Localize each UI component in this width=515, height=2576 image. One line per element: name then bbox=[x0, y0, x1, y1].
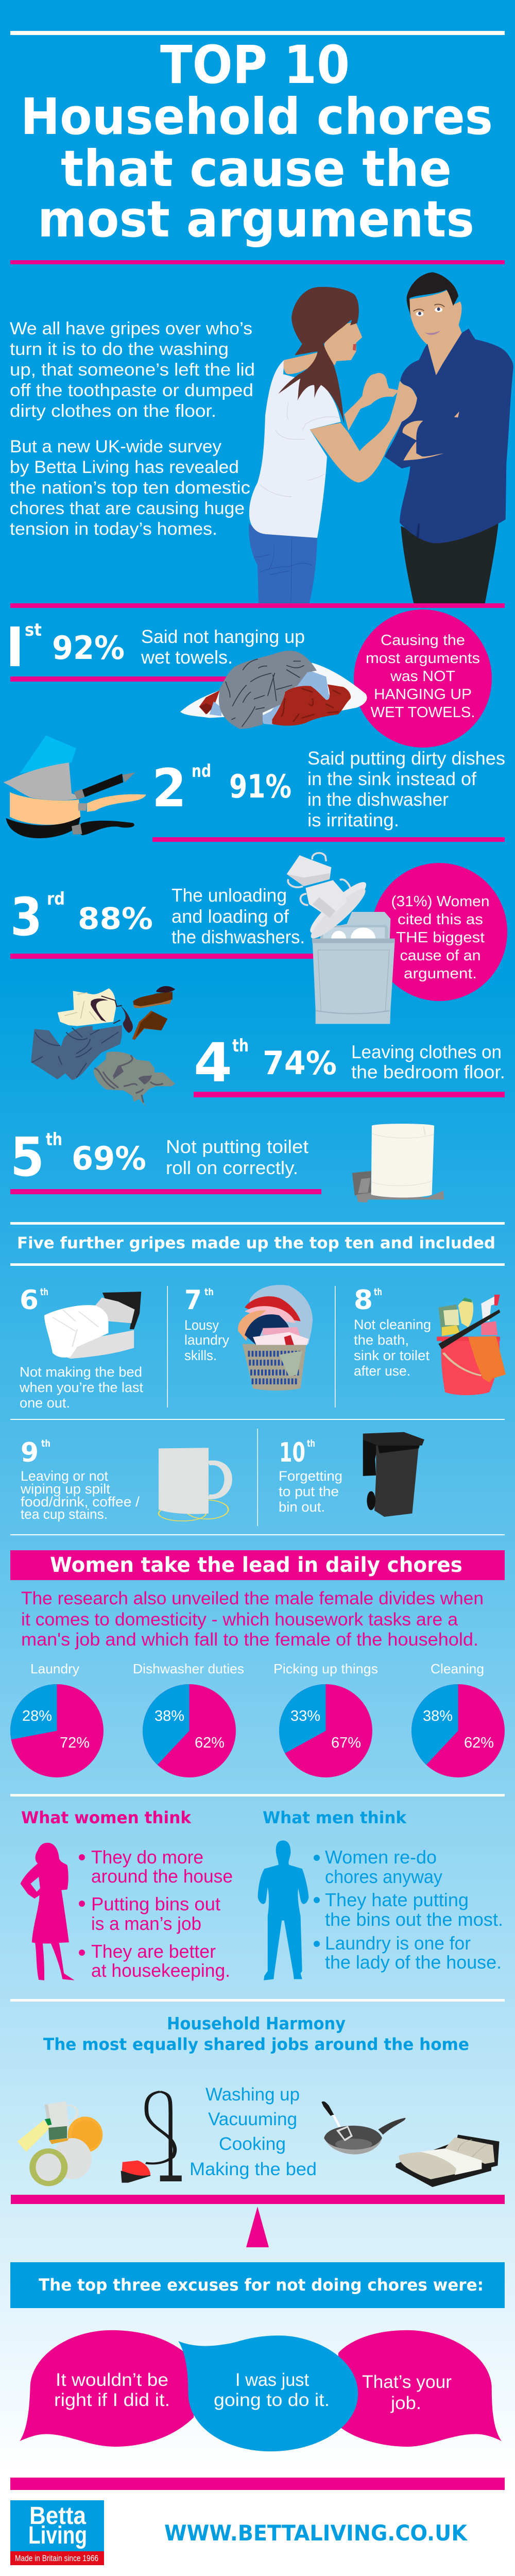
callout: causing the most arguments: HANGING UP bbox=[374, 686, 472, 703]
callout: 31% of women: cause of an bbox=[400, 947, 481, 964]
intro text: But a new UK-wide survey bbox=[10, 437, 221, 456]
intro text: by Betta Living has revealed bbox=[10, 457, 239, 477]
callout: 31% of women: THE biggest bbox=[396, 929, 485, 946]
panel: what men think: Women re-do bbox=[325, 1846, 437, 1868]
chore 9: cup stains: Leaving or not bbox=[21, 1468, 108, 1484]
panel: what men think: Laundry is one for bbox=[325, 1933, 471, 1954]
chore 9: cup stains: 9 bbox=[21, 1437, 39, 1468]
speech bubble: I was just going to do it bbox=[178, 2335, 358, 2451]
icon: frying pan bbox=[321, 2102, 405, 2155]
shared jobs list: Vacuuming bbox=[208, 2109, 297, 2129]
banner: top three excuses: The top three excuses for not doing chores were: bbox=[39, 2275, 484, 2295]
chore 3: loading the dishwasher: 88% bbox=[78, 901, 153, 936]
panel: what men think: chores anyway bbox=[325, 1866, 442, 1887]
pie chart: laundry: 72% bbox=[60, 1735, 90, 1751]
panel: what women think: What women think bbox=[21, 1808, 192, 1827]
chore 5: toilet roll: Not putting toilet bbox=[166, 1136, 308, 1157]
chore 3: loading the dishwasher bbox=[10, 885, 319, 959]
callout: causing the most arguments: WET TOWELS. bbox=[371, 704, 475, 721]
heading: household harmony: The most equally shared jobs around the home bbox=[43, 2035, 469, 2054]
pie chart: picking up things bbox=[273, 1661, 378, 1777]
chore 8: not cleaning the bath: th bbox=[374, 1286, 382, 1298]
callout: causing the most arguments: Causing the bbox=[381, 632, 465, 649]
speech bubble: that's your job: job. bbox=[390, 2393, 421, 2413]
pie chart: laundry: 28% bbox=[22, 1708, 52, 1724]
speech bubble: I was just going to do it: I was just bbox=[235, 2370, 309, 2390]
intro text: the nation’s top ten domestic bbox=[10, 478, 250, 498]
intro text: We all have gripes over who’s bbox=[10, 319, 252, 338]
speech bubble: I was just going to do it: going to do it. bbox=[214, 2390, 330, 2410]
panel: what women think: They are better bbox=[91, 1941, 216, 1962]
chore 2: dirty dishes in the sink bbox=[152, 748, 505, 842]
heading: household harmony: Household Harmony bbox=[167, 2013, 346, 2033]
chore 1: not hanging up wet towels: 1 bbox=[10, 616, 20, 679]
icon: made bed bbox=[396, 2134, 499, 2187]
panel: what men think: the lady of the house. bbox=[325, 1952, 502, 1973]
panel: what women think: around the house bbox=[91, 1866, 233, 1887]
banner: women take the lead: Women take the lead in daily chores bbox=[50, 1553, 462, 1577]
pie chart: picking up things: 33% bbox=[290, 1708, 320, 1724]
heading: five further gripes: Five further gripes made up the top ten and included bbox=[17, 1234, 495, 1252]
panel: what women think: at housekeeping. bbox=[91, 1960, 230, 1981]
chore 2: dirty dishes in the sink: in the dishwasher bbox=[307, 789, 449, 810]
shared jobs list: Making the bed bbox=[190, 2159, 317, 2179]
chore 4: clothes on the bedroom floor: 74% bbox=[263, 1044, 337, 1082]
chore 2: dirty dishes in the sink: is irritating. bbox=[307, 809, 399, 831]
chore 4: clothes on the bedroom floor: th bbox=[232, 1036, 249, 1056]
chore 5: toilet roll bbox=[10, 1126, 321, 1194]
pie chart: cleaning bbox=[411, 1661, 505, 1777]
speech bubble: that's your job: That’s your bbox=[362, 2372, 452, 2392]
chore 3: loading the dishwasher: 3 bbox=[10, 887, 42, 948]
chore 8: not cleaning the bath: the bath, bbox=[354, 1332, 409, 1348]
intro text: turn it is to do the washing bbox=[10, 340, 229, 359]
chore 7: lousy laundry skills: th bbox=[204, 1286, 214, 1298]
chore 2: dirty dishes in the sink: 2 bbox=[152, 758, 186, 819]
speech bubble: that's your job bbox=[338, 2330, 502, 2447]
speech bubble: it wouldn't be right: right if I did it. bbox=[54, 2390, 170, 2410]
chore 10: forgetting the bin: 10 bbox=[279, 1437, 305, 1468]
panel: what women think: They do more bbox=[91, 1846, 203, 1868]
chore 2: dirty dishes in the sink: 91% bbox=[229, 768, 291, 805]
chore 6: not making the bed bbox=[19, 1285, 143, 1411]
pie chart: picking up things: Picking up things bbox=[273, 1661, 378, 1676]
intro text: tension in today’s homes. bbox=[10, 519, 217, 539]
icon: toilet roll bbox=[352, 1124, 444, 1202]
pie chart: cleaning: Cleaning bbox=[431, 1661, 484, 1676]
pie chart: cleaning: 62% bbox=[464, 1735, 494, 1751]
title: Household chores bbox=[21, 88, 493, 146]
callout: 31% of women: cited this as bbox=[398, 911, 483, 928]
icon: clothes on the floor bbox=[31, 986, 175, 1107]
callout: 31% of women: (31%) Women bbox=[391, 893, 489, 910]
chore 10: forgetting the bin: Forgetting bbox=[279, 1468, 342, 1484]
man bbox=[385, 272, 513, 604]
chore 2: dirty dishes in the sink: in the sink instead of bbox=[307, 768, 477, 789]
speech bubble: it wouldn't be right: It wouldn’t be bbox=[56, 2370, 168, 2390]
chore 10: forgetting the bin bbox=[279, 1432, 424, 1517]
intro text: dirty clothes on the floor. bbox=[10, 401, 216, 421]
title: most arguments bbox=[38, 190, 474, 248]
chore 5: toilet roll: 5 bbox=[10, 1126, 44, 1189]
logo: Betta Living: Made in Britain since 1966 bbox=[15, 2553, 98, 2563]
chore 4: clothes on the bedroom floor bbox=[194, 1031, 505, 1097]
icon: vacuum cleaner bbox=[121, 2092, 182, 2183]
callout: 31% of women: argument. bbox=[404, 965, 477, 982]
pie chart: laundry bbox=[10, 1661, 104, 1777]
chore 10: forgetting the bin: bin out. bbox=[279, 1499, 325, 1515]
heading: household harmony bbox=[43, 2013, 469, 2054]
chore 1: not hanging up wet towels: wet towels. bbox=[141, 647, 233, 668]
chore 10: forgetting the bin: th bbox=[307, 1438, 315, 1449]
chore 6: not making the bed: 6 bbox=[20, 1285, 39, 1316]
chore 10: forgetting the bin: to put the bbox=[279, 1484, 339, 1499]
chore 4: clothes on the bedroom floor: Leaving clothes on bbox=[351, 1041, 502, 1062]
arrow: pink triangle bbox=[246, 2207, 269, 2247]
chore 8: not cleaning the bath: after use. bbox=[354, 1363, 410, 1379]
chore 8: not cleaning the bath: 8 bbox=[354, 1285, 373, 1316]
shared jobs list: Washing up bbox=[205, 2084, 300, 2105]
chore 8: not cleaning the bath: sink or toilet bbox=[354, 1348, 430, 1363]
callout: causing the most arguments: most arguments bbox=[366, 650, 480, 667]
chore 5: toilet roll: th bbox=[46, 1129, 62, 1150]
panel: what men think bbox=[258, 1808, 503, 1980]
chore 1: not hanging up wet towels bbox=[10, 616, 305, 682]
research text bbox=[21, 1588, 484, 1650]
chore 7: lousy laundry skills: skills. bbox=[184, 1348, 217, 1363]
woman bbox=[249, 287, 417, 604]
intro text: off the toothpaste or dumped bbox=[10, 381, 253, 400]
chore 6: not making the bed: when you’re the last bbox=[19, 1380, 143, 1395]
pie chart: dishwasher duties bbox=[133, 1661, 244, 1777]
icon: dishwasher with dishes bbox=[287, 853, 395, 1024]
panel: what women think: is a man’s job bbox=[91, 1913, 201, 1934]
icon: stained mug bbox=[159, 1448, 228, 1521]
chore 9: cup stains: food/drink, coffee / bbox=[21, 1494, 140, 1510]
title bbox=[21, 35, 493, 248]
chore 8: not cleaning the bath: Not cleaning bbox=[354, 1317, 431, 1332]
pie chart: dishwasher duties: Dishwasher duties bbox=[133, 1661, 244, 1676]
research text: it comes to domesticity - which housework tasks are a bbox=[21, 1609, 458, 1630]
title: that cause the bbox=[61, 140, 452, 198]
chore 2: dirty dishes in the sink: nd bbox=[192, 761, 211, 782]
chore 4: clothes on the bedroom floor: 4 bbox=[194, 1031, 232, 1094]
icon: unmade bed bbox=[44, 1292, 141, 1359]
chore 7: lousy laundry skills: 7 bbox=[184, 1285, 202, 1316]
pie chart: cleaning: 38% bbox=[423, 1708, 453, 1724]
research text: The research also unveiled the male female divides when bbox=[21, 1588, 484, 1608]
banner: top three excuses bbox=[10, 2262, 505, 2308]
icon: cleaning bucket bbox=[437, 1295, 506, 1395]
chore 6: not making the bed: th bbox=[40, 1286, 48, 1298]
panel: what women think bbox=[21, 1808, 233, 1981]
chore 3: loading the dishwasher: The unloading bbox=[171, 885, 287, 906]
panel: what women think: Putting bins out bbox=[91, 1893, 220, 1914]
chore 9: cup stains: tea cup stains. bbox=[21, 1506, 108, 1522]
chore 4: clothes on the bedroom floor: the bedroom floor. bbox=[351, 1061, 505, 1082]
logo: Betta Living bbox=[10, 2500, 104, 2565]
panel: what men think: They hate putting bbox=[325, 1889, 469, 1910]
icon: woman silhouette bbox=[21, 1843, 75, 1980]
shared jobs list: Cooking bbox=[219, 2134, 286, 2154]
website url: WWW.BETTALIVING.CO.UK bbox=[164, 2520, 468, 2546]
chore 2: dirty dishes in the sink: Said putting dirty dishes bbox=[307, 748, 505, 769]
callout: causing the most arguments bbox=[354, 609, 492, 748]
research text: man's job and which fall to the female of the household. bbox=[21, 1630, 478, 1650]
callout: 31% of women bbox=[371, 863, 507, 1001]
pie chart: dishwasher duties: 62% bbox=[195, 1735, 225, 1751]
chore 1: not hanging up wet towels: Said not hanging up bbox=[141, 626, 305, 647]
icon: stack of pans bbox=[3, 736, 146, 838]
chore 5: toilet roll: roll on correctly. bbox=[166, 1157, 298, 1178]
chore 6: not making the bed: Not making the bed bbox=[20, 1364, 142, 1380]
icon: wheelie bin bbox=[363, 1432, 424, 1517]
intro text bbox=[10, 319, 255, 539]
chore 3: loading the dishwasher: and loading of bbox=[171, 906, 289, 927]
chore 3: loading the dishwasher: rd bbox=[47, 889, 65, 909]
pie chart: laundry: Laundry bbox=[30, 1661, 79, 1676]
chore 1: not hanging up wet towels: st bbox=[25, 620, 42, 640]
logo: Betta Living: Betta bbox=[29, 2502, 86, 2530]
chore 7: lousy laundry skills bbox=[184, 1285, 313, 1391]
chore 7: lousy laundry skills: laundry bbox=[184, 1332, 229, 1348]
speech bubble: it wouldn't be right bbox=[20, 2330, 194, 2447]
chore 1: not hanging up wet towels: 92% bbox=[52, 629, 125, 667]
chore 9: cup stains bbox=[20, 1437, 228, 1522]
icon: man silhouette bbox=[258, 1840, 308, 1980]
icon: washing up bbox=[18, 2101, 102, 2186]
banner: women take the lead bbox=[10, 1550, 505, 1580]
pie chart: dishwasher duties: 38% bbox=[154, 1708, 184, 1724]
chore 5: toilet roll: 69% bbox=[72, 1140, 146, 1177]
chore 7: lousy laundry skills: Lousy bbox=[184, 1317, 219, 1333]
title: TOP 10 bbox=[160, 35, 350, 96]
shared jobs list bbox=[190, 2084, 317, 2179]
panel: what men think: the bins out the most. bbox=[325, 1909, 503, 1930]
panel: what men think: What men think bbox=[263, 1808, 407, 1827]
icon: laundry basket bbox=[238, 1285, 313, 1391]
chore 9: cup stains: wiping up spilt bbox=[20, 1481, 111, 1497]
illustration: arguing couple bbox=[249, 272, 513, 604]
logo: Betta Living: Living bbox=[28, 2522, 87, 2549]
intro text: chores that are causing huge bbox=[10, 499, 245, 518]
chore 6: not making the bed: one out. bbox=[20, 1395, 70, 1411]
callout: causing the most arguments: was NOT bbox=[390, 668, 455, 685]
intro text: up, that someone’s left the lid bbox=[10, 360, 255, 380]
chore 9: cup stains: th bbox=[41, 1438, 50, 1449]
chore 3: loading the dishwasher: the dishwashers. bbox=[171, 926, 305, 947]
pie chart: picking up things: 67% bbox=[331, 1735, 361, 1751]
icon: pile of towels bbox=[180, 651, 367, 729]
chore 8: not cleaning the bath bbox=[354, 1285, 506, 1395]
